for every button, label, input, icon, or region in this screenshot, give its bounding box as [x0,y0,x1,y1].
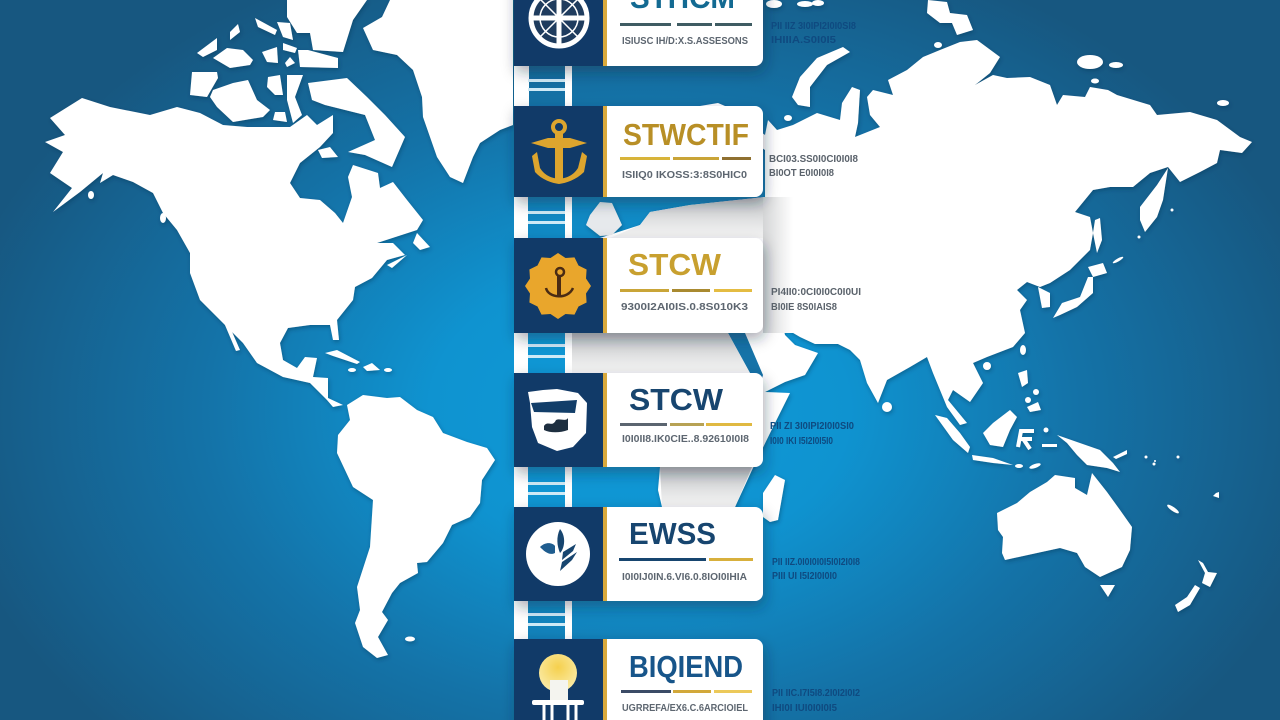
title: EWSS: EWSS [629,516,716,551]
icon: sailor cap [528,389,587,451]
card shadows cast on land [572,197,793,507]
ladder connectors [514,66,572,639]
divider line [620,289,752,292]
Southeast Asia islands [882,370,1127,472]
Arctic Russia islands [766,0,1229,121]
title: STCW navy: STCW [629,382,724,417]
Greenland [363,0,513,183]
card 6 panel [514,639,763,720]
card caption: ISIUSC IH/D:X.S.ASSESONS [622,36,748,47]
card caption: I0I0IJ0IN.6.VI6.0.8IOI0IHIA [622,572,747,583]
continent: Australia [997,473,1132,577]
card 4 panel [514,373,763,467]
card caption: I0I0II8.IK0CIE..8.92610I0I8 [622,434,749,445]
continent: North America [45,98,423,407]
side note 6: PII IIC.I7I5I8.2I0I2I0I2 [772,687,860,699]
icon: ship wheel [529,0,589,48]
New Zealand and Pacific islands [1144,456,1219,612]
Madagascar [763,475,785,522]
side note 3: PI4II0:0CI0I0C0I0UI [771,286,861,298]
card 3 [514,238,763,333]
side note 4 [770,420,854,447]
divider line [621,690,752,693]
side note 2: BI0OT E0I0I0I8 [769,167,834,179]
Caribbean islands [325,350,392,372]
title: STWCTIF: STWCTIF [623,117,749,152]
side note 2: BCI03.SS0I0CI0I0I8 [769,153,858,165]
card 1 [514,0,763,66]
side note 5: PII IIZ.0I0I0I0I5I0I2I0I8 [772,556,860,568]
Arctic islands [88,0,430,351]
side note 4: PII ZI 3I0IPI2I0I0SI0 [770,420,854,432]
icon: gold badge with anchor [525,253,591,319]
icon: lighthouse with glowing lamp [532,654,584,720]
card 5 [514,507,763,601]
card 1 panel [514,0,763,66]
title: BIQIEND: BIQIEND [629,649,743,684]
divider line [619,558,753,561]
card 5 panel [514,507,763,601]
side note 6 [772,687,860,714]
card 2 panel [514,106,763,197]
icon: leaf and sail emblem [526,522,590,586]
card caption: UGRREFA/EX6.C.6ARCIOIEL [622,703,748,714]
continents: Eurasia and Africa [572,40,1252,507]
East Asia islands [983,168,1174,370]
side note 1: IHIIIA.S0I0I5 [771,34,836,46]
Red Sea [728,333,763,392]
side note 1: PII IIZ 3I0IPI2I0I0SI8 [771,20,856,32]
card 2 [514,106,763,197]
card 6 [514,639,763,720]
card caption: 9300I2AI0IS.0.8S010K3 [621,302,749,313]
divider line [620,157,751,160]
side note 5: PIII UI I5I2I0I0I0 [772,570,837,582]
icon: anchor [531,121,587,184]
divider line [620,423,752,426]
side note 3: BI0IE 8S0IAIS8 [771,301,837,313]
side note 3 [771,286,861,313]
continent: South America [337,395,495,658]
side note 6: IHI0I IUI0I0I0I5 [772,702,837,714]
title: STCW gold: STCW [628,247,722,282]
card caption: ISIIQ0 IKOSS:3:8S0HIC0 [622,170,747,181]
side note 2 [769,153,858,179]
Britain and Ireland [586,202,622,236]
card 3 panel [514,238,763,333]
card 4 [514,373,763,467]
divider line [620,23,752,26]
side note 1 [771,20,856,46]
side note 4: I0I0 IKI I5I2I0I5I0 [770,435,833,447]
side note 5 [772,556,860,582]
